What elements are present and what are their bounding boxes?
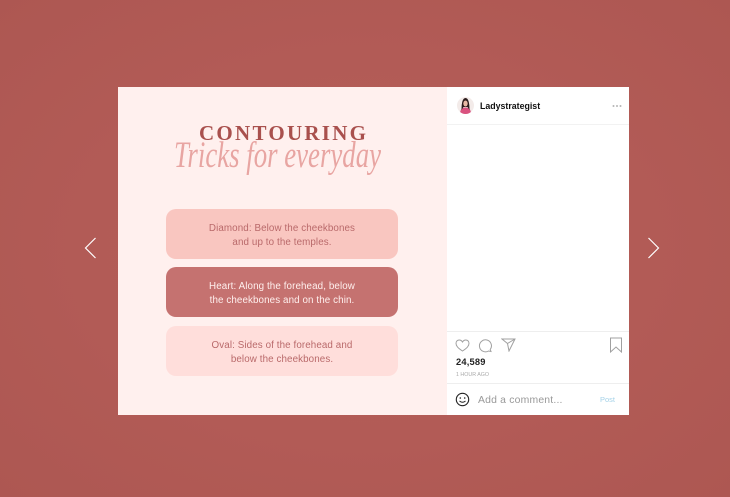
icon: heart xyxy=(456,340,470,352)
icon: smiley xyxy=(456,392,470,406)
card: heart xyxy=(166,267,398,317)
arrow: next xyxy=(648,238,660,258)
card: diamond xyxy=(166,209,398,259)
card: oval xyxy=(166,326,398,376)
username: Ladystrategist xyxy=(480,101,540,111)
likes count: 24,589 xyxy=(456,357,486,367)
card: heart: Heart: Along the forehead, below xyxy=(209,280,355,292)
heading: contouring: CONTOURING xyxy=(199,121,366,145)
icon: more options xyxy=(612,105,622,107)
comment input placeholder: Add a comment... xyxy=(478,395,563,406)
title xyxy=(174,121,381,176)
card: diamond: and up to the temples. xyxy=(232,236,332,248)
card: diamond: Diamond: Below the cheekbones xyxy=(209,222,355,234)
timestamp: 1 HOUR AGO xyxy=(456,372,489,378)
card: heart: the cheekbones and on the chin. xyxy=(210,294,354,306)
panel: post sidebar xyxy=(447,87,629,415)
icon: share xyxy=(501,338,516,352)
arrow: previous xyxy=(84,238,96,258)
card: oval: below the cheekbones. xyxy=(231,354,333,364)
post button: Post xyxy=(600,395,615,404)
icon: avatar xyxy=(457,97,474,114)
icon: comment xyxy=(478,339,492,352)
icon: bookmark xyxy=(610,338,622,353)
card: oval: Oval: Sides of the forehead and xyxy=(212,340,352,350)
panel: slide xyxy=(118,87,447,415)
